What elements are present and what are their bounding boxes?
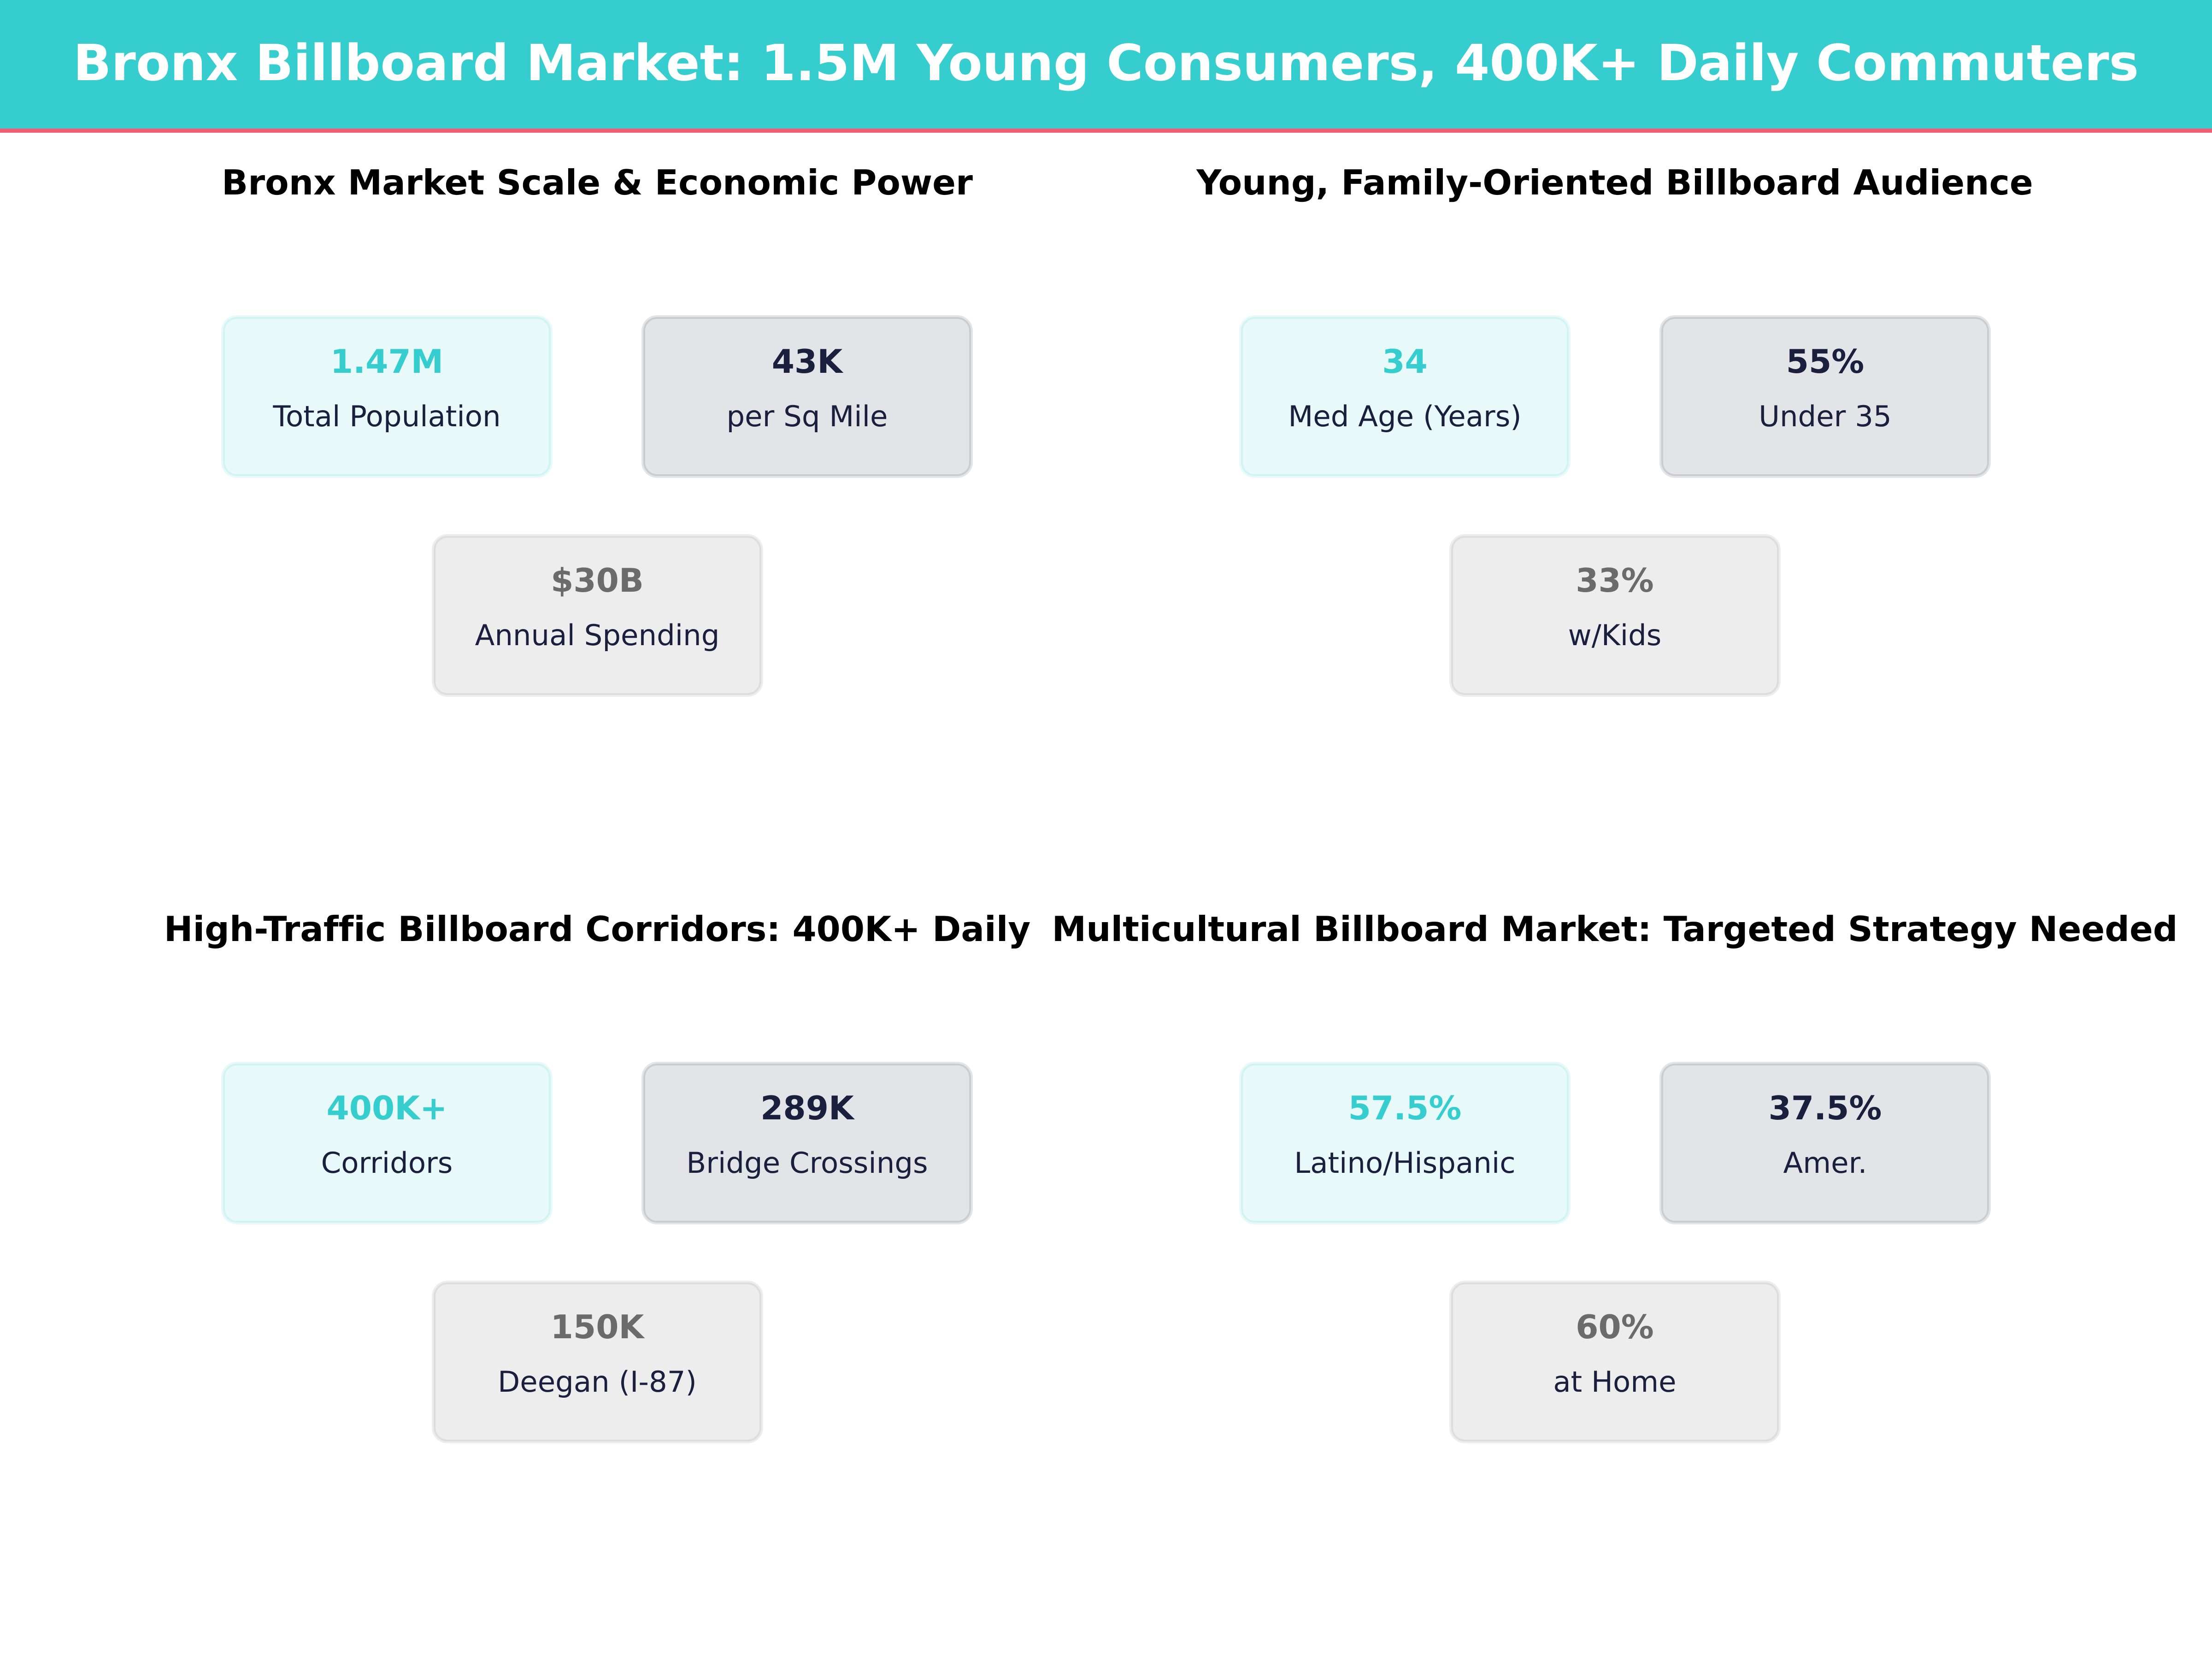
stat card: deegan <box>434 1282 761 1441</box>
stat card: under 35: Under 35 <box>1759 400 1892 433</box>
stat card: with kids: 33% <box>1576 561 1654 600</box>
panel: market scale <box>222 162 973 695</box>
stat card: latino: 57.5% <box>1348 1089 1461 1127</box>
stat card: median age: Med Age (Years) <box>1288 400 1522 433</box>
heading: market scale: Bronx Market Scale & Economic Power <box>222 162 973 203</box>
heading: audience: Young, Family-Oriented Billboard Audience <box>1196 162 2033 203</box>
stat card: american: 37.5% <box>1769 1089 1882 1127</box>
stat card: corridors <box>223 1064 551 1223</box>
stat card: density <box>643 317 971 476</box>
stat card: at home: at Home <box>1553 1365 1677 1399</box>
stat card: median age: 34 <box>1382 342 1428 381</box>
stat card: deegan: Deegan (I-87) <box>498 1365 697 1399</box>
stat card: corridors: 400K+ <box>326 1089 447 1127</box>
stat card: annual spending: $30B <box>551 561 644 600</box>
stat card: density: 43K <box>772 342 844 381</box>
stat card: bridge crossings: 289K <box>760 1089 855 1127</box>
stat card: american: Amer. <box>1783 1146 1867 1180</box>
heading: multicultural: Multicultural Billboard Market: Targeted Strategy Needed <box>1052 909 2178 949</box>
heading: corridors: High-Traffic Billboard Corridors: 400K+ Daily <box>164 909 1030 949</box>
stat card: deegan: 150K <box>551 1308 645 1346</box>
title banner <box>0 0 2212 133</box>
stat card: american <box>1661 1064 1989 1223</box>
stat card: at home <box>1451 1282 1779 1441</box>
stat card: under 35 <box>1661 317 1989 476</box>
panel: audience <box>1196 162 2033 695</box>
stat card: annual spending: Annual Spending <box>475 618 719 652</box>
panel: corridors <box>164 909 1030 1441</box>
title: Bronx Billboard Market: 1.5M Young Consumers, 400K+ Daily Commuters <box>73 34 2139 92</box>
stat card: latino: Latino/Hispanic <box>1294 1146 1516 1180</box>
stat card: with kids <box>1451 536 1779 695</box>
stat card: corridors: Corridors <box>321 1146 453 1180</box>
stat card: with kids: w/Kids <box>1568 618 1661 652</box>
stat card: at home: 60% <box>1576 1308 1654 1346</box>
stat card: bridge crossings <box>643 1064 971 1223</box>
stat card: latino <box>1241 1064 1569 1223</box>
stat card: annual spending <box>434 536 761 695</box>
stat card: total population: Total Population <box>272 400 501 433</box>
stat card: total population <box>223 317 551 476</box>
stat card: density: per Sq Mile <box>726 400 888 433</box>
stat card: median age <box>1241 317 1569 476</box>
panel: multicultural <box>1052 909 2178 1441</box>
stat card: total population: 1.47M <box>330 342 443 381</box>
stat card: under 35: 55% <box>1786 342 1864 381</box>
stat card: bridge crossings: Bridge Crossings <box>686 1146 928 1180</box>
